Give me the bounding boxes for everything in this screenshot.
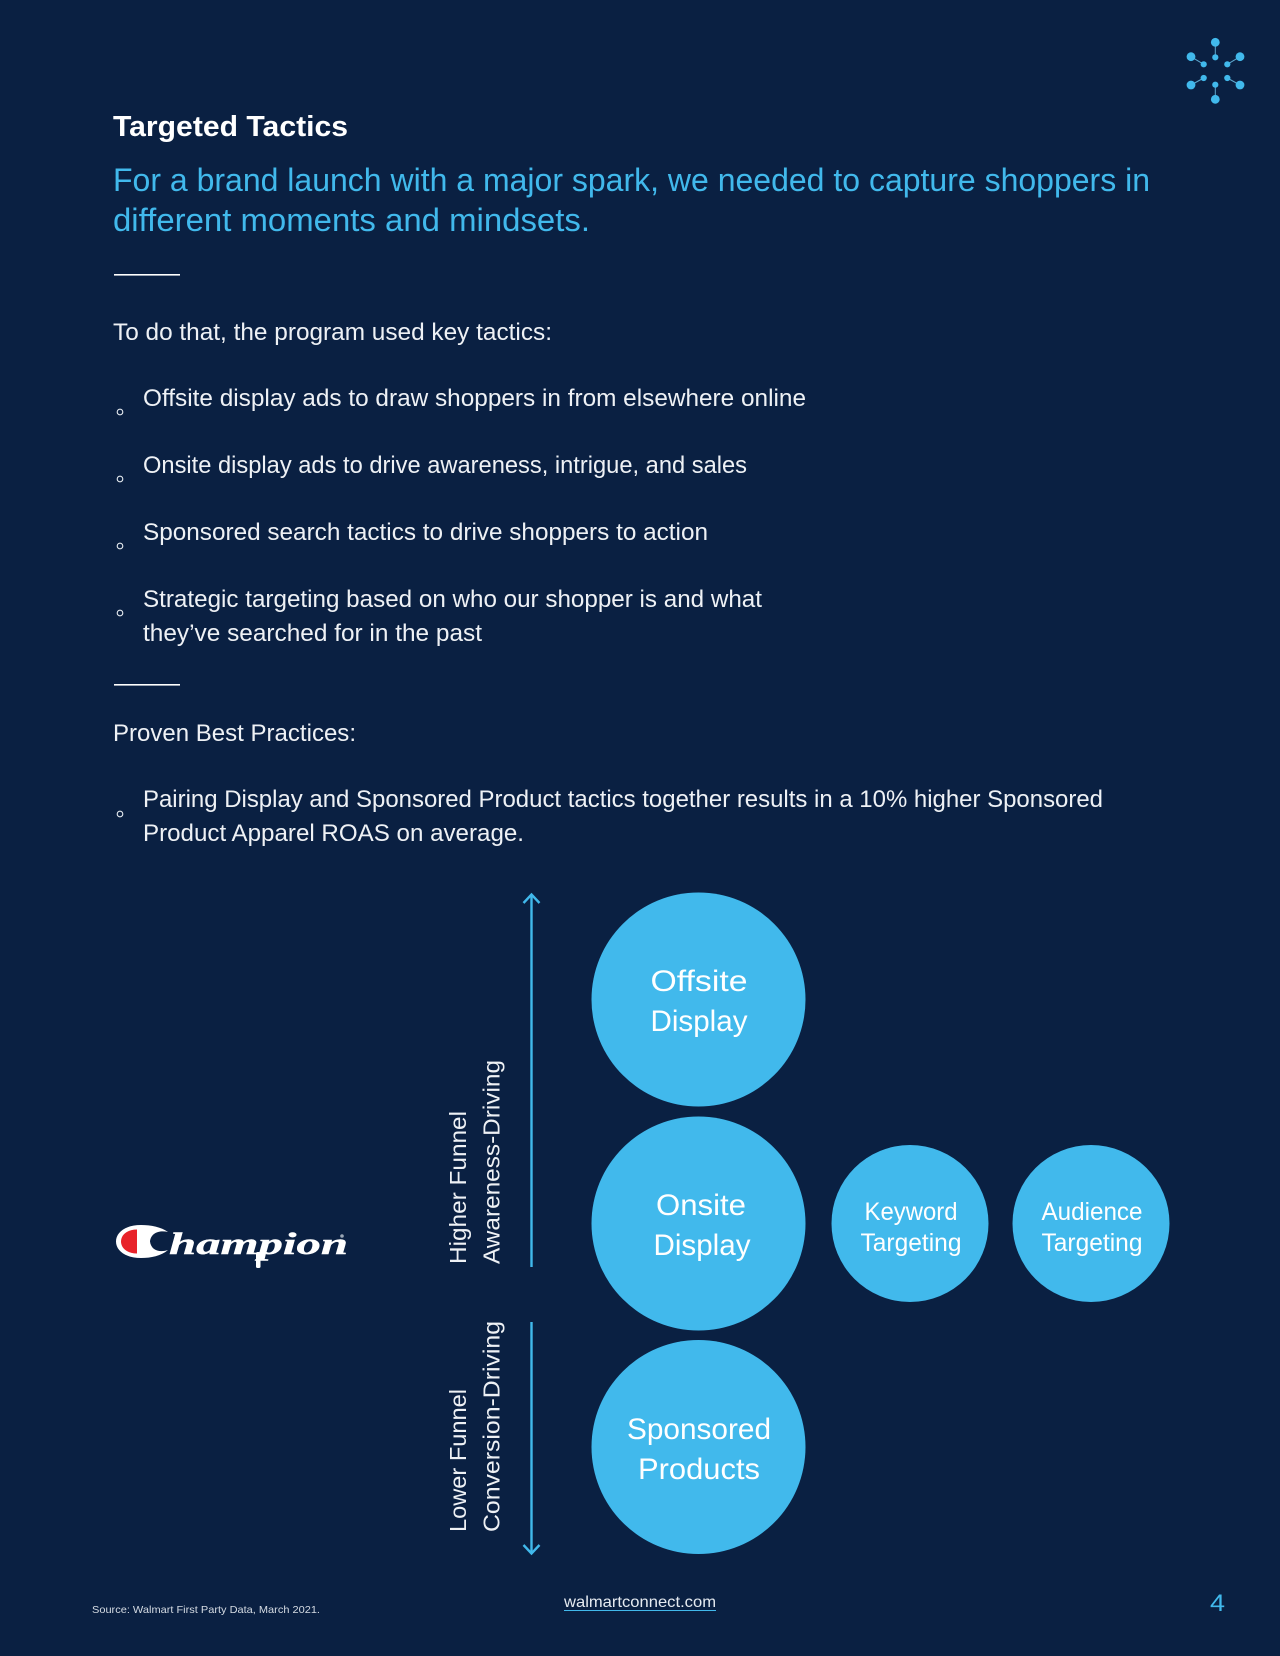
logo emblem: [116, 1225, 168, 1258]
circle: sponsored products: Sponsored: [627, 1413, 771, 1446]
arrow: up: [524, 894, 540, 1267]
funnel label: lower: Conversion-Driving: [478, 1321, 504, 1532]
circle: audience targeting: [1012, 1145, 1170, 1302]
funnel label: lower: Lower Funnel: [445, 1389, 471, 1532]
bullet: offsite display: Offsite display ads to draw shoppers in from elsewhere online: [143, 385, 806, 412]
circle: offsite display: Display: [650, 1005, 748, 1038]
funnel label: lower: [445, 1321, 504, 1532]
footer link: walmartconnect.com: [563, 1594, 716, 1611]
tactics list: [117, 385, 806, 647]
best practices bullet: Product Apparel ROAS on average.: [143, 820, 524, 847]
logo wordmark: hampion: [169, 1226, 348, 1261]
bullet: strategic targeting: Strategic targeting based on who our shopper is and what: [143, 586, 762, 613]
circle: sponsored products: [592, 1340, 806, 1554]
bullet: sponsored search: Sponsored search tactics to drive shoppers to action: [143, 519, 708, 546]
bullet: onsite display: Onsite display ads to drive awareness, intrigue, and sales: [143, 452, 747, 479]
best practices bullet: Pairing Display and Sponsored Product tactics together results in a 10% higher Sponsored: [143, 786, 1103, 813]
bullet: strategic targeting: [117, 586, 762, 647]
circle: keyword targeting: Keyword: [864, 1198, 958, 1226]
circle: onsite display: [592, 1116, 806, 1330]
best practices bullet: [117, 786, 1103, 847]
subtitle: [113, 162, 1150, 238]
circle: offsite display: [592, 892, 806, 1106]
bullet: strategic targeting: they’ve searched for in the past: [143, 620, 482, 647]
title: Targeted Tactics: [113, 111, 348, 143]
funnel label: higher: Awareness-Driving: [478, 1060, 504, 1264]
funnel label: higher: [445, 1060, 504, 1264]
circle: onsite display: Display: [654, 1229, 750, 1262]
circle: onsite display: Onsite: [656, 1189, 746, 1222]
funnel label: higher: Higher Funnel: [445, 1111, 471, 1264]
circle: keyword targeting: [832, 1145, 988, 1302]
intro text: To do that, the program used key tactics:: [113, 319, 552, 346]
circle: audience targeting: Audience: [1042, 1198, 1142, 1226]
subtitle: For a brand launch with a major spark, we needed to capture shoppers in: [113, 162, 1150, 198]
best practices heading: Proven Best Practices:: [113, 720, 356, 747]
icon: spark network logo: [1187, 38, 1244, 104]
circle: keyword targeting: Targeting: [860, 1229, 962, 1257]
subtitle: different moments and mindsets.: [113, 202, 590, 238]
arrow: down: [524, 1322, 540, 1554]
page number: 4: [1210, 1590, 1225, 1617]
source note: Source: Walmart First Party Data, March 2021.: [92, 1604, 320, 1616]
circle: offsite display: Offsite: [650, 965, 748, 998]
circle: audience targeting: Targeting: [1042, 1229, 1142, 1257]
circle: sponsored products: Products: [638, 1453, 760, 1486]
logo: Champion: [116, 1225, 348, 1268]
